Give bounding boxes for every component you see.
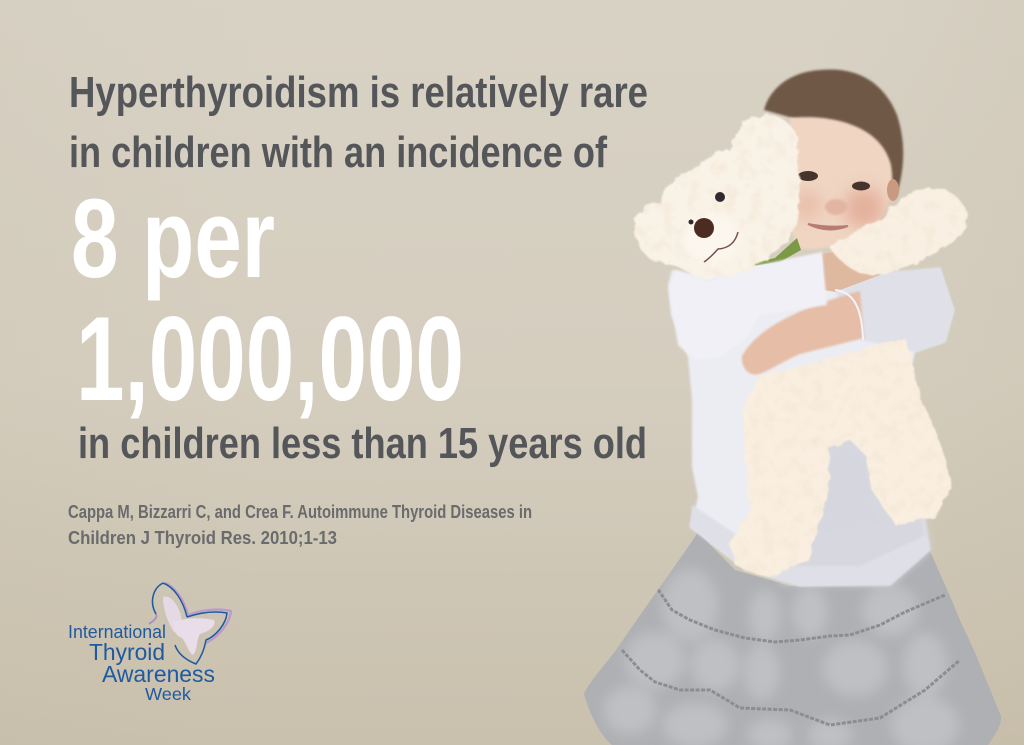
citation: Cappa M, Bizzarri C, and Crea F. Autoimmune Thyroid Diseases in [68,502,532,522]
bear scarf [748,238,801,266]
logo wordmark: Awareness [102,661,215,687]
logo wordmark: Thyroid [89,639,165,665]
bear leg shadow gap [822,447,880,530]
key statistic: 8 per 1,000,000 [71,176,464,426]
citation: Children J Thyroid Res. 2010;1-13 [68,528,337,548]
photo: girl hugging teddy bear [570,69,1020,745]
forearm [742,291,864,375]
neck and upper arm skin [822,250,880,292]
sleeve cuff [835,290,863,340]
heading: intro sentence: Hyperthyroidism is relatively rare [69,68,648,117]
heading: intro sentence: in children with an incidence of [69,128,607,177]
hair [764,69,903,198]
face [785,117,899,249]
logo: International Thyroid Awareness Week [68,583,231,704]
skirt ruffles [622,585,960,725]
logo wordmark [68,622,215,704]
bear head [634,114,799,279]
icon: butterfly with world map [149,583,231,664]
key statistic: 8 per 1,000,000: 1,000,000 [76,292,464,426]
bear body and legs [730,338,952,578]
bear arm [830,188,967,275]
logo wordmark: International [68,622,166,642]
citation [68,502,532,548]
white shirt [668,255,954,586]
subheading: age group: in children less than 15 years old [78,419,647,468]
skirt [584,533,1001,745]
shirt sleeve [669,252,827,360]
key statistic: 8 per 1,000,000: 8 per [71,176,275,301]
heading: intro sentence [69,68,648,177]
logo wordmark: Week [145,684,191,704]
